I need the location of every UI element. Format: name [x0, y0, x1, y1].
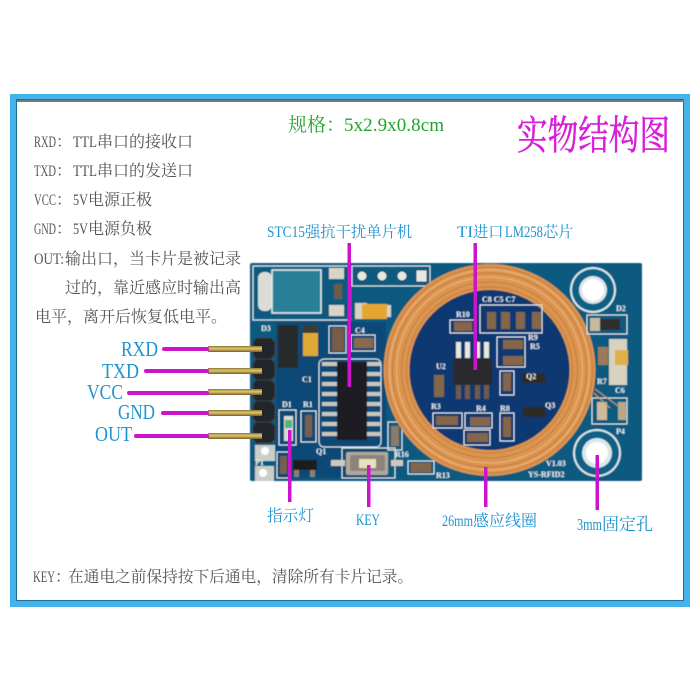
callout labels: 强抗干扰单片机	[305, 223, 412, 241]
pin descriptions: OUT:	[34, 251, 64, 268]
silk labels: R8	[500, 404, 510, 413]
capacitor tantalum	[303, 325, 318, 356]
Q1	[293, 460, 317, 477]
callout labels: 指示灯	[267, 507, 314, 525]
pin descriptions: 5V	[73, 192, 88, 209]
pin descriptions: 电源负极	[88, 219, 152, 238]
callout labels: 3mm	[577, 515, 602, 534]
silk labels: R10	[456, 310, 470, 319]
pin descriptions: ：	[56, 163, 72, 180]
right components	[587, 315, 628, 424]
callout labels: 芯片	[543, 223, 574, 241]
STC15 chip	[322, 362, 381, 440]
pin descriptions: ：	[56, 221, 72, 238]
dark inner board	[407, 288, 571, 452]
antenna pad area	[253, 266, 350, 320]
silk labels: R7	[597, 377, 607, 386]
silk labels: R13	[436, 471, 450, 480]
callout labels: TI	[457, 224, 473, 241]
silk labels: U2	[436, 362, 446, 371]
pin descriptions: TTL	[73, 134, 97, 151]
silk labels: R3	[431, 402, 441, 411]
pin descriptions: 电源正极	[88, 190, 152, 209]
spec line: 5x2.9x0.8cm	[344, 115, 444, 136]
callout labels: 感应线圈	[473, 512, 537, 530]
callout labels	[267, 223, 653, 534]
silk labels: C8 C5 C7	[482, 295, 515, 304]
silk labels: R5	[530, 342, 540, 351]
pin header	[253, 338, 275, 481]
LED D1	[279, 410, 296, 445]
pin labels: RXD	[121, 337, 158, 361]
C4	[351, 335, 375, 351]
pin descriptions	[34, 133, 241, 326]
silk labels: Q2	[526, 372, 536, 381]
callout labels: STC15	[267, 224, 305, 241]
silk labels: D1	[282, 400, 292, 409]
silk labels	[255, 295, 626, 480]
pin descriptions: 过的，靠近感应时输出高	[65, 278, 241, 297]
silk labels: Q3	[545, 401, 555, 410]
silk labels: C4	[355, 326, 365, 335]
LM258 chip	[453, 342, 492, 399]
pin pointer lines	[127, 347, 209, 438]
pin descriptions: ：	[56, 192, 72, 209]
Y resistor	[329, 326, 346, 353]
small left components	[277, 422, 434, 478]
silk labels: R4	[476, 404, 486, 413]
callout labels: 固定孔	[602, 515, 653, 534]
IC lines silk	[319, 359, 381, 447]
frame	[10, 94, 690, 607]
silk labels: D2	[616, 304, 626, 313]
silk labels: R9	[528, 333, 538, 342]
small components	[433, 305, 545, 445]
key note: 在通电之前保持按下后通电，清除所有卡片记录。	[68, 568, 413, 586]
silk labels: V1.03	[546, 459, 566, 468]
pin descriptions: 5V	[73, 221, 88, 238]
pin descriptions: ：	[56, 134, 72, 151]
spec line: 规格：	[288, 114, 345, 136]
callout labels: 进口	[473, 224, 504, 241]
key button	[331, 448, 403, 478]
silk labels: YS-RFID2	[528, 470, 564, 479]
callout labels: KEY	[356, 512, 380, 529]
mounting hole bottom	[573, 429, 621, 477]
pin descriptions: TXD	[34, 163, 56, 180]
pin descriptions: TTL	[73, 163, 97, 180]
pin labels	[87, 337, 158, 446]
pin descriptions: 电平，离开后恢复低电平。	[35, 308, 227, 326]
key note: KEY	[33, 569, 55, 586]
pin labels: GND	[118, 400, 155, 424]
pin labels: VCC	[87, 380, 123, 404]
pin labels: TXD	[102, 359, 139, 383]
silk labels: P1	[255, 458, 264, 467]
pin labels: OUT	[95, 422, 132, 446]
pin descriptions: GND	[34, 221, 56, 238]
silk labels: D3	[261, 324, 271, 333]
silk labels: P4	[616, 427, 625, 436]
capacitor C2	[355, 303, 391, 319]
callout labels: LM258	[505, 224, 543, 241]
pin descriptions: 串口的接收口	[97, 133, 193, 151]
D3 diode	[278, 325, 298, 368]
silk labels: C1	[302, 375, 312, 384]
header holes	[352, 266, 430, 286]
callout pointer lines	[288, 243, 599, 510]
silk labels: C6	[615, 386, 625, 395]
callout labels: 26mm	[442, 513, 473, 530]
gold pins	[208, 346, 262, 439]
circuit board	[250, 263, 642, 481]
pin descriptions: VCC	[34, 192, 56, 209]
silk labels: R16	[395, 450, 409, 459]
silk labels: Q1	[316, 447, 326, 456]
pin descriptions: RXD	[34, 134, 56, 151]
mounting hole top	[570, 267, 616, 313]
key note: ：	[55, 569, 71, 586]
pin descriptions: 串口的发送口	[97, 162, 193, 180]
silk labels: R1	[303, 400, 313, 409]
induction coil	[386, 267, 592, 473]
R1	[301, 411, 316, 442]
pin descriptions: 输出口，当卡片是被记录	[65, 250, 241, 268]
